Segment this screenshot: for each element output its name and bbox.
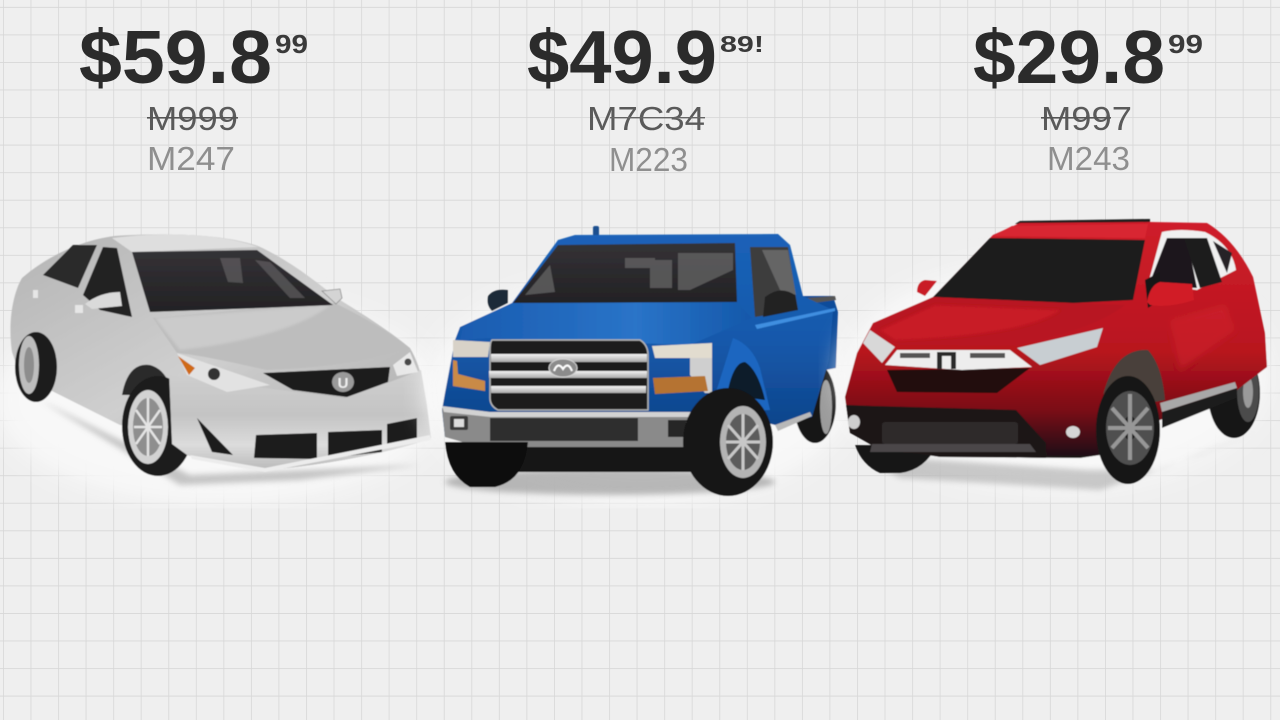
car: silver sedan [0,234,445,505]
wheel arch [1103,350,1165,402]
door handles [33,290,83,313]
emblem [937,352,956,369]
main price: $29.8 [973,15,1165,99]
lower bumper cladding [846,405,1080,458]
windshield [933,238,1145,303]
truck bed [800,296,838,372]
front right wheel [683,388,773,496]
car: blue pickup truck [425,226,855,505]
hood [153,303,407,370]
roof rail [1015,219,1150,225]
struck-through old value: M999 [147,100,238,137]
antenna [593,226,599,240]
side windows [43,245,132,317]
superscript cents: 99 [1168,29,1203,59]
cab and body [442,234,833,447]
side mirror [1147,282,1194,306]
lower intakes [197,418,417,459]
grille [263,367,390,397]
front-left tire [855,445,937,473]
secondary value: M223 [609,141,688,178]
headlight right [393,352,418,376]
left headlight [453,340,490,391]
main price: $49.9 [527,15,717,99]
windshield [132,250,333,312]
price block: silver sedan [79,15,308,177]
superscript cents: 99 [275,29,308,59]
price block: red SUV [973,15,1203,177]
emblem: U [338,375,348,392]
rear wheel [1208,348,1260,438]
front fender and wheel arch [712,338,770,412]
left headlight [863,330,895,363]
roof highlight [112,235,258,252]
grille [489,340,648,410]
main price: $59.8 [79,15,272,99]
superscript cents: 89! [720,31,764,57]
right headlight [652,343,712,394]
struck-through old value: M7C34 [587,100,705,137]
front wheel [1096,376,1160,484]
roof highlight [993,224,1148,238]
far mirror [322,289,342,304]
emblem [332,372,354,392]
rear wheel [794,363,836,443]
side windows [1150,238,1232,288]
side sill [1160,382,1237,412]
windshield [513,243,737,303]
headlight left [177,353,270,392]
mirror shadow base [1145,272,1160,308]
white halo and ground shadow [0,295,445,505]
side mirror [85,292,122,309]
far mirror [917,280,937,296]
body shell [10,234,431,470]
white halo and ground shadow [840,260,1270,490]
bumper [442,406,725,452]
side window [750,247,798,317]
undercarriage [460,447,720,472]
struck-through old value: M997 [1041,100,1132,137]
white halo and ground shadow [425,275,855,505]
price block: blue truck [527,15,764,178]
bumper lip [190,435,431,472]
front left tire [445,442,528,487]
front wheel [122,365,194,476]
emblem [549,359,577,377]
car: red SUV [840,219,1270,490]
rear wheel [15,332,57,402]
hood [460,302,752,345]
side mirror [488,290,508,311]
secondary value: M243 [1047,140,1130,177]
body shell [845,222,1267,458]
front bumper [169,370,431,470]
right headlight [1017,328,1103,365]
side body highlight [1170,305,1235,370]
door shine line [755,308,835,329]
chrome window trim [1148,230,1236,290]
step bar [775,412,812,431]
hood [873,297,1125,346]
lower grille [887,368,1030,393]
secondary value: M247 [147,140,235,177]
chrome grille bar [885,350,1032,370]
